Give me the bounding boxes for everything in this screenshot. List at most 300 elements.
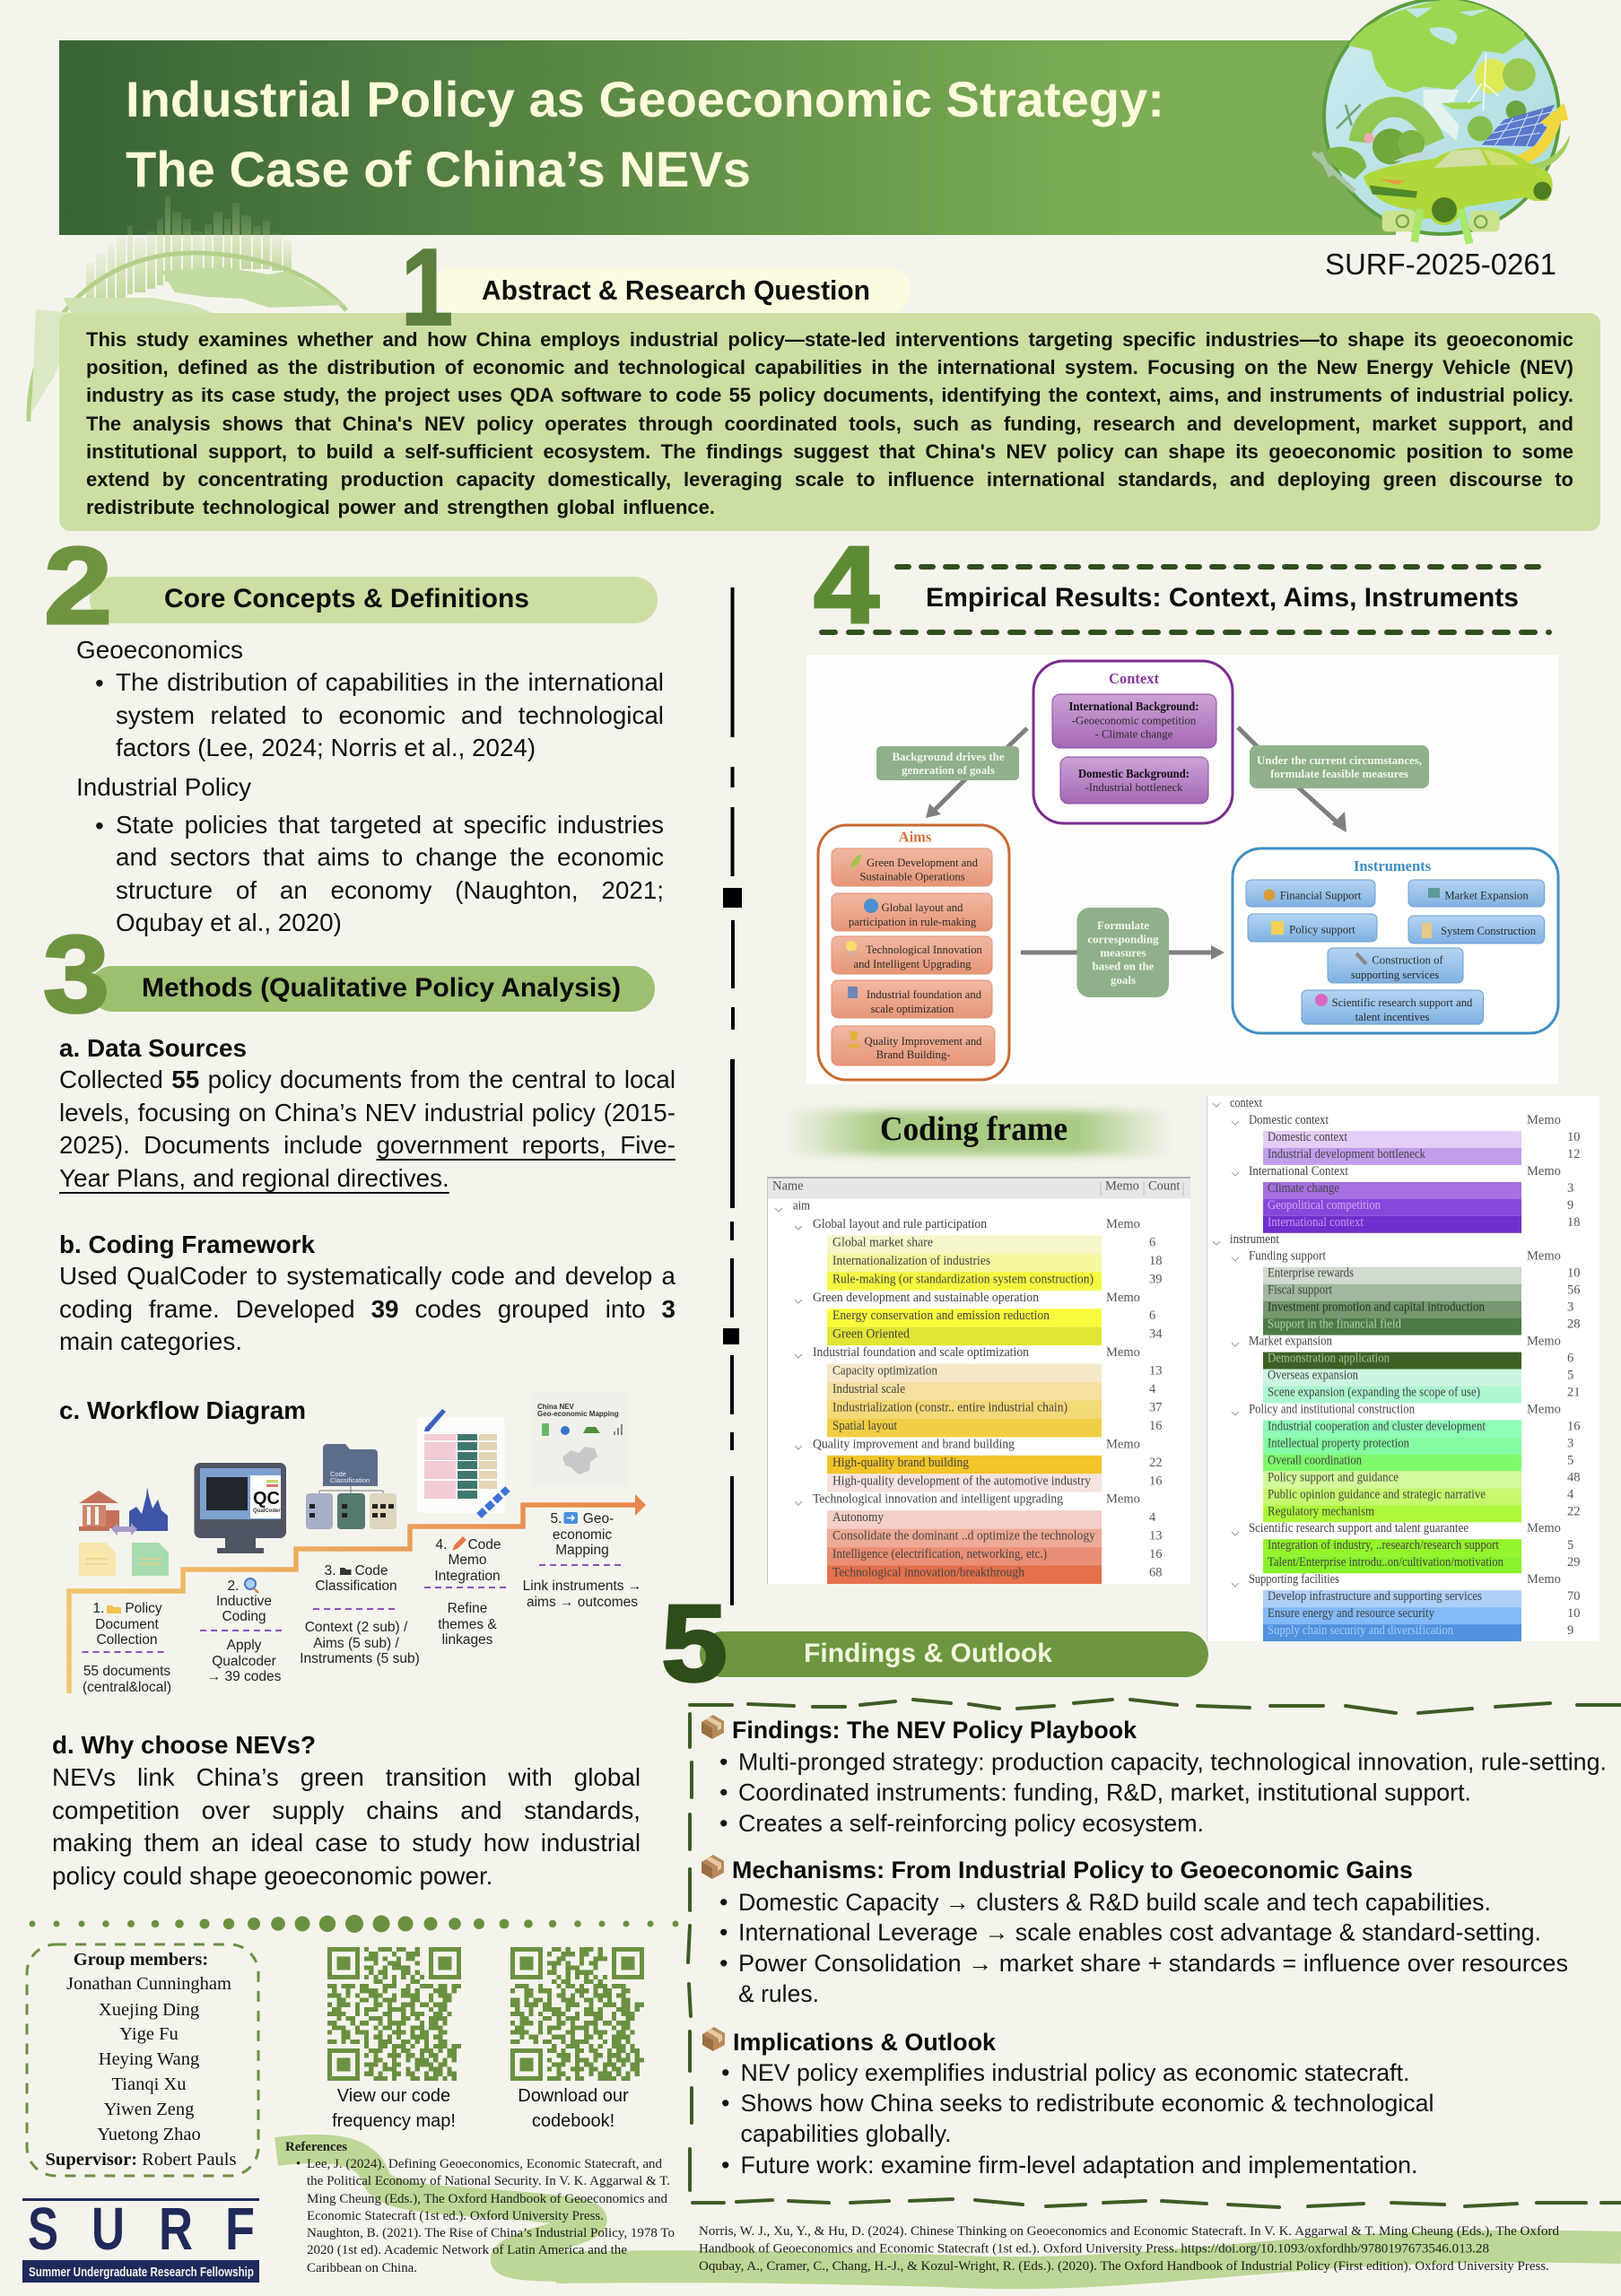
SURF logo: U bbox=[92, 2196, 125, 2263]
aims box: participation in rule-making bbox=[849, 916, 977, 928]
method subheadings: d. Why choose NEVs? bbox=[52, 1731, 316, 1759]
count column: 48 bbox=[1567, 1470, 1581, 1484]
references left: 2020 (1st ed). Academic Network of Latin America and the bbox=[307, 2243, 627, 2257]
group members box: Yige Fu bbox=[119, 2024, 179, 2044]
code names: Fiscal support bbox=[1268, 1283, 1333, 1298]
SURF logo bbox=[22, 2196, 259, 2283]
abstract text: industry as its case study, the project uses QDA software to code 55 policy documents, identifying the context, aims, and instruments of industrial policy. bbox=[86, 384, 1573, 406]
step 3 label: Instruments (5 sub) bbox=[300, 1651, 420, 1666]
chevrons bbox=[775, 1208, 802, 1505]
workflow diagram bbox=[69, 1393, 646, 1695]
count column: 12 bbox=[1567, 1147, 1581, 1161]
QR captions: View our code bbox=[337, 2086, 450, 2106]
aims box: Technological Innovation bbox=[866, 944, 983, 956]
code names: High-quality brand building bbox=[832, 1456, 969, 1470]
step 5 label bbox=[523, 1511, 641, 1610]
count column: 16 bbox=[1149, 1547, 1163, 1561]
count column: 16 bbox=[1149, 1419, 1163, 1433]
step 5 label: economic bbox=[553, 1527, 612, 1543]
section number 1: 1 bbox=[401, 226, 453, 348]
group members box bbox=[27, 1944, 258, 2176]
count column bbox=[1567, 1130, 1581, 1638]
instruments box: talent incentives bbox=[1355, 1011, 1429, 1023]
icon: geo-economic map: Geo-economic Mapping bbox=[537, 1410, 619, 1418]
icon: geo-economic map bbox=[531, 1393, 629, 1486]
code names: instrument bbox=[1230, 1232, 1280, 1247]
code names: Technological innovation and intelligent upgrading bbox=[813, 1492, 1063, 1507]
label: feasible measures: formulate feasible measures bbox=[1270, 768, 1408, 780]
label: formulate measures: goals bbox=[1111, 974, 1136, 987]
icon: code memo table bbox=[417, 1409, 508, 1516]
code names: Market expansion bbox=[1249, 1335, 1332, 1349]
code names: Domestic context bbox=[1249, 1113, 1329, 1127]
decorative city on globe bbox=[29, 196, 346, 422]
icon: code classification folders bbox=[306, 1444, 397, 1529]
label: formulate measures: based on the bbox=[1093, 961, 1155, 973]
group members box: Yuetong Zhao bbox=[97, 2125, 201, 2144]
findings block: • bbox=[719, 1749, 728, 1776]
definition: geoeconomics: factors (Lee, 2024; Norris et al., 2024) bbox=[116, 734, 536, 761]
code names: Energy conservation and emission reduction bbox=[832, 1309, 1050, 1323]
definition: industrial policy bbox=[116, 811, 664, 936]
label: feasible measures: Under the current circumstances, bbox=[1257, 754, 1422, 767]
code names: Domestic context bbox=[1268, 1130, 1348, 1144]
section 2 heading: Core Concepts & Definitions bbox=[164, 584, 529, 613]
code names: Intelligence (electrification, networking, etc.) bbox=[832, 1547, 1047, 1561]
arrowheads bbox=[926, 804, 1346, 960]
count column: 4 bbox=[1149, 1382, 1156, 1396]
instruments box: System Construction bbox=[1441, 925, 1537, 937]
icon: package bbox=[702, 1715, 724, 1739]
label: feasible measures bbox=[1250, 745, 1429, 788]
implications block bbox=[702, 2027, 1434, 2179]
why NEVs text: policy could shape geoeconomic power. bbox=[52, 1862, 492, 1890]
step 1 label: 55 documents bbox=[83, 1664, 170, 1679]
SURF logo: R bbox=[159, 2196, 193, 2263]
count column: 13 bbox=[1149, 1529, 1163, 1544]
step 4 label: themes & bbox=[438, 1617, 497, 1632]
findings block: Findings: The NEV Policy Playbook bbox=[732, 1717, 1137, 1744]
count column: 16 bbox=[1567, 1419, 1581, 1433]
code names: Public opinion guidance and strategic narrative bbox=[1268, 1487, 1486, 1501]
step 4 label: linkages bbox=[442, 1632, 493, 1648]
aims box: scale optimization bbox=[871, 1003, 954, 1015]
SURF logo: S bbox=[28, 2196, 58, 2263]
aims box bbox=[818, 825, 1009, 1080]
QR captions: Download our bbox=[518, 2086, 629, 2106]
count column: 39 bbox=[1149, 1272, 1163, 1286]
memo column: Memo bbox=[1527, 1164, 1561, 1178]
implications block: Shows how China seeks to redistribute economic & technological bbox=[741, 2090, 1434, 2117]
findings block: Multi-pronged strategy: production capacity, technological innovation, rule-setting. bbox=[738, 1749, 1607, 1776]
code names: Supporting facilities bbox=[1249, 1572, 1339, 1587]
definition: geoeconomics: The distribution of capabilities in the international bbox=[116, 668, 664, 696]
group members box: Yiwen Zeng bbox=[104, 2100, 194, 2119]
project code: SURF-2025-0261 bbox=[1325, 248, 1556, 281]
concept labels: • bbox=[95, 669, 104, 697]
references left: References bbox=[285, 2140, 347, 2154]
code names: Talent/Enterprise introdu..on/cultivation/motivation bbox=[1268, 1555, 1503, 1570]
findings block: Creates a self-reinforcing policy ecosystem. bbox=[738, 1810, 1204, 1837]
icon: package bbox=[702, 1855, 724, 1879]
implications block: • bbox=[721, 2059, 729, 2086]
mechanisms block: & rules. bbox=[738, 1980, 819, 2007]
code names: Demonstration application bbox=[1268, 1352, 1390, 1366]
code names: Technological innovation/breakthrough bbox=[832, 1566, 1024, 1580]
definition: industrial policy: Oqubay et al., 2020) bbox=[116, 909, 342, 936]
abstract text: The analysis shows that China's NEV policy operates through coordinated tools, such as funding, research and development, market support, and bbox=[86, 413, 1573, 435]
coding framework text: main categories. bbox=[59, 1327, 242, 1355]
section 2 heading bbox=[44, 525, 658, 647]
code names: Internationalization of industries bbox=[832, 1254, 990, 1268]
aims box: and Intelligent Upgrading bbox=[853, 958, 972, 970]
implications block: • bbox=[721, 2090, 729, 2117]
data sources text: 2025). Documents include government reports, Five- bbox=[59, 1131, 675, 1159]
step 2 label: Apply bbox=[227, 1638, 262, 1653]
count column: 28 bbox=[1567, 1318, 1581, 1332]
count column bbox=[1149, 1235, 1163, 1580]
step 1 label: (central&local) bbox=[83, 1680, 171, 1695]
step 1 label: Policy bbox=[125, 1601, 162, 1616]
section 5 heading: 5 bbox=[661, 1582, 728, 1704]
code names: Industrialization (constr.. entire industrial chain) bbox=[832, 1401, 1068, 1415]
context box: Domestic Background: bbox=[1078, 767, 1190, 780]
step 3 label: Context (2 sub) / bbox=[305, 1620, 408, 1635]
references left: Ming Cheung (Eds.), The Oxford Handbook of Geoeconomics and bbox=[307, 2192, 668, 2206]
memo column: Memo bbox=[1527, 1403, 1561, 1417]
concept labels: Industrial Policy bbox=[76, 773, 251, 801]
mechanisms block: • bbox=[719, 1919, 728, 1946]
icon: code classification folders: Classification bbox=[330, 1476, 370, 1484]
count column: 70 bbox=[1567, 1589, 1581, 1604]
mechanisms block: International Leverage → scale enables cost advantage & standard-setting. bbox=[738, 1919, 1541, 1946]
code names: Intellectual property protection bbox=[1268, 1436, 1409, 1450]
code names: Climate change bbox=[1268, 1181, 1339, 1196]
method subheadings: a. Data Sources bbox=[59, 1034, 247, 1062]
count column: 6 bbox=[1149, 1235, 1155, 1249]
label: background drives goals bbox=[876, 746, 1019, 780]
decorative ribbon behind references bbox=[276, 2149, 1621, 2273]
step 2 label: Coding bbox=[222, 1609, 266, 1624]
data sources text: Year Plans, and regional directives. bbox=[59, 1164, 449, 1192]
title text bbox=[126, 71, 1164, 197]
aims box: Sustainable Operations bbox=[859, 871, 965, 883]
method subheadings bbox=[52, 1034, 316, 1759]
references right: Oqubay, A., Cramer, C., Chang, H.-J., & Kozul-Wright, R. (Eds.). (2020). The Oxford Handbook of Industrial Policy (First edition). Oxford University Press. bbox=[699, 2259, 1549, 2274]
aims box: Brand Building- bbox=[876, 1048, 950, 1061]
code names: Green Oriented bbox=[832, 1327, 910, 1342]
count column: 5 bbox=[1567, 1453, 1573, 1467]
code names: High-quality development of the automotive industry bbox=[832, 1474, 1091, 1488]
references right: Handbook of Geoeconomics and Economic Statecraft (1st ed.). Oxford University Press. https://doi.org/10.1093/oxfordhb/9780197673546.013.28 bbox=[699, 2242, 1489, 2257]
code names: Investment promotion and capital introduction bbox=[1268, 1300, 1485, 1315]
implications block: • bbox=[721, 2152, 729, 2179]
references left: the Political Economy of National Security. In V. K. Aggarwal & T. bbox=[307, 2174, 670, 2188]
references right: Norris, W. J., Xu, Y., & Hu, D. (2024). Chinese Thinking on Geoeconomics and Economic Statecraft. In V. K. Aggarwal & T. Ming Cheung (Eds.), The Oxford bbox=[699, 2224, 1560, 2239]
code names: Geopolitical competition bbox=[1268, 1198, 1381, 1213]
references right bbox=[699, 2224, 1560, 2274]
step 4 label bbox=[424, 1536, 510, 1648]
aims box: Green Development and bbox=[867, 857, 979, 869]
memo column: Memo bbox=[1527, 1572, 1561, 1587]
code names: Develop infrastructure and supporting services bbox=[1268, 1589, 1482, 1604]
count column: 5 bbox=[1567, 1538, 1573, 1552]
instruments box: Construction of bbox=[1372, 954, 1443, 967]
aims box: Global layout and bbox=[882, 901, 963, 914]
label: formulate measures: Formulate bbox=[1097, 919, 1149, 932]
memo column: Memo bbox=[1106, 1291, 1140, 1305]
references left: Caribbean on China. bbox=[307, 2261, 417, 2275]
code names: Global market share bbox=[832, 1235, 933, 1249]
code names: Policy support and guidance bbox=[1268, 1470, 1399, 1484]
implications block: NEV policy exemplifies industrial policy as economic statecraft. bbox=[741, 2059, 1410, 2086]
instruments box: Instruments bbox=[1354, 857, 1432, 874]
findings block: • bbox=[719, 1779, 728, 1806]
memo column: Memo bbox=[1106, 1492, 1140, 1507]
count column: 22 bbox=[1567, 1504, 1581, 1518]
count column: 10 bbox=[1567, 1266, 1581, 1281]
QR code: codebook bbox=[510, 1947, 644, 2081]
findings block: • bbox=[719, 1810, 728, 1837]
section 4 heading: 4 bbox=[814, 524, 879, 646]
code names: Support in the financial field bbox=[1268, 1318, 1401, 1332]
coding framework text: coding frame. Developed 39 codes grouped into 3 bbox=[59, 1295, 675, 1323]
QR captions bbox=[332, 2086, 629, 2131]
label: formulate measures bbox=[1076, 908, 1169, 997]
count column: 68 bbox=[1149, 1566, 1163, 1580]
label: background drives goals: Background drives the bbox=[892, 751, 1005, 763]
title banner bbox=[59, 40, 1396, 235]
data sources text: Collected 55 policy documents from the central to local bbox=[59, 1065, 675, 1093]
count column: 10 bbox=[1567, 1606, 1581, 1621]
code names: Consolidate the dominant ..d optimize the technology bbox=[832, 1529, 1095, 1544]
references left: Economic Statecraft (1st ed.). Oxford University Press. bbox=[307, 2209, 604, 2223]
count column: 56 bbox=[1567, 1283, 1581, 1298]
QR code: code frequency map bbox=[327, 1947, 461, 2081]
count column: 6 bbox=[1149, 1309, 1155, 1323]
step 5 label: 5. bbox=[551, 1511, 562, 1526]
colored code bars bbox=[827, 1235, 1102, 1584]
code names: Capacity optimization bbox=[832, 1364, 937, 1378]
icon: QualCoder monitor: QualCoder bbox=[253, 1509, 281, 1514]
step 1 label: Collection bbox=[96, 1632, 158, 1648]
section 3 heading: Methods (Qualitative Policy Analysis) bbox=[142, 973, 621, 1003]
aims box: Industrial foundation and bbox=[867, 988, 982, 1001]
why NEVs text: NEVs link China’s green transition with global bbox=[52, 1763, 641, 1791]
references left: Lee, J. (2024). Defining Geoeconomics, Economic Statecraft, and bbox=[307, 2157, 663, 2171]
why NEVs text bbox=[52, 1761, 641, 1893]
context box bbox=[1033, 661, 1233, 823]
step 1 label: Document bbox=[95, 1617, 160, 1632]
count column: 9 bbox=[1567, 1198, 1573, 1213]
aims box: Quality Improvement and bbox=[864, 1035, 982, 1048]
count column: 4 bbox=[1149, 1510, 1156, 1525]
step 2 label: Qualcoder bbox=[212, 1654, 276, 1669]
code names: Funding support bbox=[1249, 1249, 1327, 1264]
code names: Spatial layout bbox=[832, 1419, 898, 1433]
code names: International context bbox=[1268, 1215, 1364, 1230]
definition: industrial policy: structure of an economy (Naughton, 2021; bbox=[116, 876, 664, 904]
step 2 label: Inductive bbox=[216, 1594, 272, 1609]
code names: context bbox=[1230, 1096, 1263, 1110]
staircase arrow bbox=[69, 1494, 646, 1693]
group members box: Jonathan Cunningham bbox=[66, 1974, 231, 1994]
section 5 heading bbox=[661, 1582, 1208, 1704]
code names bbox=[1230, 1096, 1503, 1638]
mechanisms block: • bbox=[719, 1950, 728, 1977]
table: aim codes: Memo bbox=[1105, 1178, 1139, 1193]
count column: 13 bbox=[1149, 1364, 1163, 1378]
code names: Scene expansion (expanding the scope of use) bbox=[1268, 1385, 1480, 1399]
count column: 4 bbox=[1567, 1487, 1574, 1501]
QR captions: codebook! bbox=[532, 2111, 614, 2131]
abstract text: This study examines whether and how China employs industrial policy—state-led interventions targeting specific industries—to shape its geoeconomic bbox=[86, 328, 1573, 351]
step 1 label bbox=[83, 1601, 171, 1695]
concept labels: • bbox=[95, 812, 104, 839]
coding framework text bbox=[59, 1262, 675, 1355]
findings block bbox=[702, 1715, 1607, 1837]
method subheadings: c. Workflow Diagram bbox=[59, 1396, 306, 1424]
mechanisms block: Domestic Capacity → clusters & R&D build scale and tech capabilities. bbox=[738, 1889, 1491, 1916]
code names: Global layout and rule participation bbox=[813, 1217, 987, 1231]
icon: geo-economic map: China NEV bbox=[537, 1403, 575, 1411]
coding framework text: Used QualCoder to systematically code and develop a bbox=[59, 1262, 675, 1290]
abstract text: extend by concentrating production capacity domestically, leveraging scale to influence international standards, and deploying green discourse to bbox=[86, 468, 1573, 491]
group members box: Heying Wang bbox=[99, 2049, 199, 2069]
definition: industrial policy: and sectors that aims to change the economic bbox=[116, 843, 664, 871]
count column: 10 bbox=[1567, 1130, 1581, 1144]
mechanisms block bbox=[702, 1855, 1568, 2007]
count column: 18 bbox=[1567, 1215, 1581, 1230]
step 5 label: aims → outcomes bbox=[527, 1595, 638, 1610]
step 4 label: Code bbox=[467, 1537, 501, 1552]
group members box: Tianqi Xu bbox=[112, 2074, 186, 2094]
arrows context to aims and instruments bbox=[933, 727, 1340, 952]
code names: Policy and institutional construction bbox=[1249, 1403, 1415, 1417]
instruments box: Scientific research support and bbox=[1332, 996, 1473, 1009]
count column: 9 bbox=[1567, 1623, 1573, 1638]
implications block: capabilities globally. bbox=[741, 2120, 951, 2147]
step 2 label: 2. bbox=[228, 1578, 239, 1594]
mechanisms block: Mechanisms: From Industrial Policy to Geoeconomic Gains bbox=[732, 1857, 1413, 1883]
data sources text bbox=[59, 1065, 675, 1194]
step 3 label: 3. bbox=[325, 1563, 336, 1578]
code names: Industrial cooperation and cluster development bbox=[1268, 1419, 1486, 1433]
abstract text: institutional support, to build a self-sufficient ecosystem. The findings suggest that China's NEV policy can shape its geoeconomic position to some bbox=[86, 440, 1573, 463]
label: background drives goals: generation of goals bbox=[902, 764, 995, 777]
coding frame heading: Coding frame bbox=[880, 1110, 1068, 1148]
count column: 37 bbox=[1149, 1401, 1163, 1415]
context box: - Climate change bbox=[1095, 728, 1173, 741]
instruments box: supporting services bbox=[1351, 969, 1439, 981]
context box: -Geoeconomic competition bbox=[1072, 715, 1197, 727]
count column: 3 bbox=[1567, 1181, 1573, 1196]
icon: policy documents bbox=[79, 1487, 169, 1576]
memo column: Memo bbox=[1106, 1437, 1140, 1451]
section 3 heading: 3 bbox=[43, 913, 109, 1035]
data sources text: levels, focusing on China’s NEV industrial policy (2015- bbox=[59, 1099, 675, 1126]
code names: Supply chain security and diversification bbox=[1268, 1623, 1453, 1638]
icon: code classification folders: Code bbox=[330, 1470, 346, 1478]
concept labels: Geoeconomics bbox=[76, 636, 243, 664]
code names: Overseas expansion bbox=[1268, 1369, 1358, 1383]
context box: Context bbox=[1109, 670, 1159, 687]
count column: 16 bbox=[1149, 1474, 1163, 1488]
step 3 label bbox=[300, 1563, 420, 1666]
dotted separator bbox=[29, 1915, 678, 1933]
abstract text: position, defined as the distribution of economic and technological capabilities in the international system. Focusing on the New Energy Vehicle (NEV) bbox=[86, 356, 1573, 378]
instruments box: Market Expansion bbox=[1444, 890, 1529, 902]
code names: Industrial development bottleneck bbox=[1268, 1147, 1425, 1161]
section 3 heading bbox=[43, 913, 655, 1035]
step 4 label: 4. bbox=[436, 1537, 447, 1552]
label: formulate measures: measures bbox=[1100, 947, 1146, 960]
step 2 label: → 39 codes bbox=[207, 1669, 282, 1684]
count column: 5 bbox=[1567, 1369, 1573, 1383]
memo column bbox=[1527, 1113, 1561, 1587]
group members box: Xuejing Ding bbox=[99, 2000, 199, 2020]
definition: geoeconomics: system related to economic and technological bbox=[116, 701, 664, 728]
section 2 heading: 2 bbox=[44, 525, 112, 647]
code names: Autonomy bbox=[832, 1510, 884, 1525]
step 3 label: Classification bbox=[315, 1578, 397, 1594]
step 5 label: Link instruments → bbox=[523, 1578, 641, 1594]
title text: The Case of China’s NEVs bbox=[126, 141, 751, 197]
code names: Industrial scale bbox=[832, 1382, 905, 1396]
code names: Regulatory mechanism bbox=[1268, 1504, 1374, 1518]
label: formulate measures: corresponding bbox=[1087, 934, 1159, 946]
code names: Scientific research support and talent guarantee bbox=[1249, 1521, 1468, 1535]
code names bbox=[793, 1198, 1095, 1580]
context box: -Industrial bottleneck bbox=[1085, 781, 1183, 794]
abstract text: redistribute technological power and strengthen global influence. bbox=[86, 496, 715, 518]
count column: 18 bbox=[1149, 1254, 1163, 1268]
code names: aim bbox=[793, 1198, 810, 1213]
code names: Green development and sustainable operation bbox=[813, 1291, 1039, 1305]
icon: package bbox=[702, 2027, 725, 2051]
step 4 label: Integration bbox=[434, 1569, 501, 1584]
section 4 heading bbox=[814, 524, 1549, 646]
memo column: Memo bbox=[1527, 1113, 1561, 1127]
references left: • bbox=[296, 2157, 301, 2171]
why NEVs text: competition over supply chains and standards, bbox=[52, 1796, 641, 1824]
mechanisms block: Power Consolidation → market share + standards = influence over resources bbox=[738, 1950, 1568, 1977]
step 3 label: Aims (5 sub) / bbox=[313, 1636, 399, 1651]
concept labels bbox=[76, 636, 251, 839]
table: context and instrument codes bbox=[1207, 1096, 1599, 1641]
step 2 label bbox=[200, 1578, 286, 1684]
table: aim codes: Count bbox=[1148, 1178, 1180, 1193]
references left: Naughton, B. (2021). The Rise of China’s Industrial Policy, 1978 To bbox=[307, 2226, 675, 2240]
definition: industrial policy: State policies that targeted at specific industries bbox=[116, 811, 664, 839]
coding frame heading bbox=[783, 1110, 1172, 1155]
mechanisms block: • bbox=[719, 1889, 728, 1916]
icon: QualCoder monitor bbox=[194, 1463, 286, 1553]
instruments box: Policy support bbox=[1289, 924, 1355, 936]
count column: 3 bbox=[1567, 1300, 1573, 1315]
context box: International Background: bbox=[1069, 700, 1198, 713]
step 5 label: Geo- bbox=[583, 1511, 614, 1526]
abstract text bbox=[86, 328, 1573, 518]
step 5 label: Mapping bbox=[555, 1543, 609, 1558]
definition: geoeconomics bbox=[116, 668, 664, 761]
table: aim codes: Name bbox=[772, 1178, 804, 1193]
step 1 label: 1. bbox=[93, 1601, 104, 1616]
count column: 22 bbox=[1149, 1456, 1163, 1470]
memo column: Memo bbox=[1527, 1249, 1561, 1264]
findings dashed frame bbox=[688, 1700, 1621, 2207]
count column: 3 bbox=[1567, 1436, 1573, 1450]
